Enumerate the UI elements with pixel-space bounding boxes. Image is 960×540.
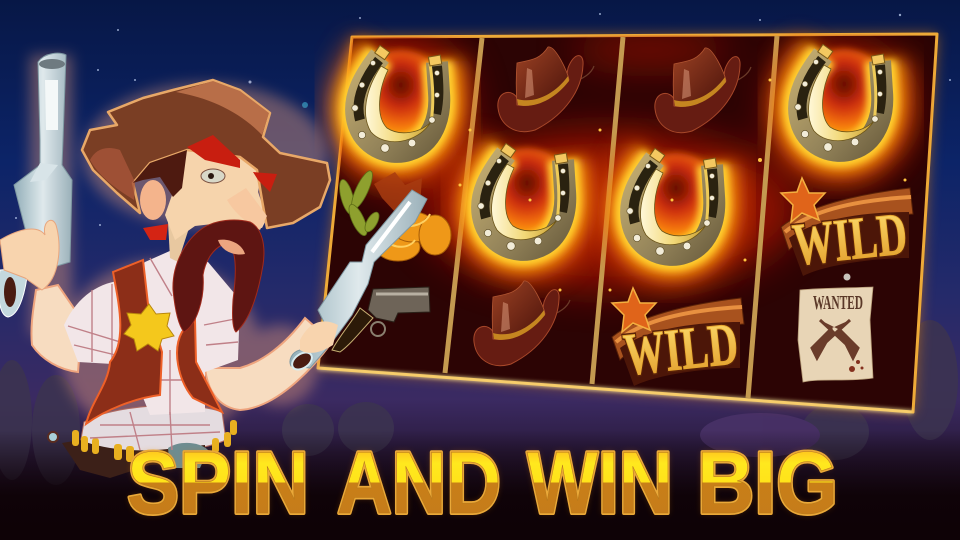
gun right bbox=[289, 190, 427, 373]
title fill: SPIN bbox=[127, 433, 309, 532]
title outline: SPIN bbox=[127, 433, 309, 532]
ear bbox=[140, 180, 166, 220]
hat bbox=[82, 80, 330, 228]
symbol: hat reel 3 bbox=[655, 48, 751, 133]
title glow: AND bbox=[337, 433, 501, 532]
sparks bbox=[458, 78, 906, 292]
red scarf bbox=[143, 224, 168, 240]
bullet belt bbox=[48, 420, 237, 478]
hair bbox=[133, 150, 187, 197]
reel red heat bbox=[330, 30, 910, 290]
title outline: AND bbox=[337, 433, 501, 532]
title glow: WIN bbox=[527, 433, 673, 532]
cowboy halo glow bbox=[30, 55, 327, 440]
cowboy character bbox=[0, 53, 427, 478]
symbol: wanted poster bbox=[798, 274, 873, 382]
symbol: revolver bbox=[332, 287, 430, 352]
title fill bbox=[127, 433, 838, 532]
title outline: WIN bbox=[527, 433, 673, 532]
symbol: horseshoe reel 1 bbox=[352, 45, 447, 152]
vest bbox=[86, 260, 222, 424]
sheriff badge bbox=[124, 304, 174, 351]
title glow: BIG bbox=[697, 433, 838, 532]
title bbox=[127, 433, 838, 532]
slot machine panel bbox=[318, 30, 937, 412]
symbol: wild reel 4 bbox=[781, 178, 913, 278]
plaid shirt bbox=[64, 250, 240, 450]
eye bbox=[201, 169, 225, 183]
symbol: horseshoe reel 4 bbox=[795, 44, 890, 151]
symbol: wanted poster: WANTED bbox=[813, 292, 863, 314]
dark floor fade bbox=[0, 430, 960, 540]
reel dividers bbox=[445, 36, 777, 398]
left arm bbox=[31, 285, 82, 372]
title outline: BIG bbox=[697, 433, 838, 532]
gun left bbox=[0, 53, 72, 317]
beard bbox=[173, 220, 264, 332]
title glow: SPIN bbox=[127, 433, 309, 532]
symbol: hat reel 2 lower bbox=[474, 281, 570, 366]
lip bbox=[218, 240, 245, 254]
title fill: WIN bbox=[527, 433, 673, 532]
right arm bbox=[205, 318, 332, 410]
symbol: horseshoe reel 3 bbox=[627, 148, 722, 255]
cowboy lower shirt bbox=[80, 405, 226, 454]
title fill: AND bbox=[337, 433, 501, 532]
symbol: sheriff star behind coins bbox=[374, 172, 422, 212]
title fill: BIG bbox=[697, 433, 838, 532]
symbol: cactus and coins bbox=[337, 168, 451, 261]
symbol: wild reel 3 bbox=[612, 288, 744, 388]
symbol: hat reel 2 bbox=[498, 47, 594, 132]
nose bbox=[227, 188, 267, 230]
face bbox=[165, 150, 267, 240]
background desert cacti bbox=[0, 320, 958, 485]
eyebrows bbox=[187, 135, 277, 192]
title glow bbox=[127, 433, 838, 532]
neck bbox=[168, 222, 190, 262]
symbol: horseshoe reel 2 bbox=[478, 143, 573, 250]
title outline bbox=[127, 433, 838, 532]
